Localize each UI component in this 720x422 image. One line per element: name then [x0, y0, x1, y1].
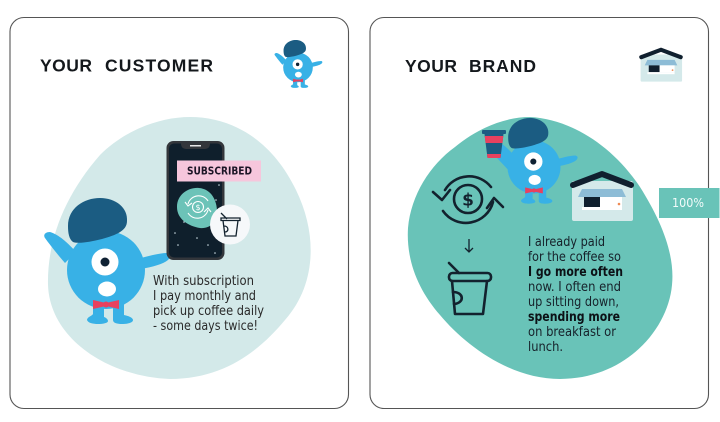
- icon: takeaway cup: [482, 130, 506, 158]
- panel: your customer: [10, 18, 348, 408]
- text: brand quote: I go more often: [528, 265, 623, 280]
- icon: recurring payment: [433, 176, 503, 223]
- icon: recurring payment on phone: $: [195, 203, 201, 212]
- text: brand quote: lunch.: [528, 340, 563, 355]
- heading: your brand: YOUR: [405, 56, 457, 76]
- text: customer quote: I pay monthly and: [153, 289, 256, 304]
- icon: coffee cup: [449, 263, 491, 314]
- panel: your brand: [370, 18, 708, 408]
- tag: 100%: 100%: [672, 196, 704, 210]
- mascot: brand with coffee: [482, 118, 578, 204]
- text: brand quote: [528, 235, 623, 355]
- blob: brand background: [408, 117, 672, 379]
- heading: your brand: BRAND: [469, 56, 536, 76]
- text: brand quote: spending more: [528, 310, 620, 325]
- text: customer quote: pick up coffee daily: [153, 304, 264, 319]
- icon: cup in circle: [210, 204, 250, 244]
- tag: 100%: [659, 188, 720, 218]
- text: brand quote: I already paid: [528, 235, 605, 250]
- heading: your brand: [405, 56, 536, 76]
- heading: your customer: CUSTOMER: [105, 56, 213, 76]
- text: customer quote: With subscription: [153, 274, 254, 289]
- mascot: customer: [44, 198, 170, 324]
- blob: customer background: [48, 117, 311, 379]
- text: brand quote: for the coffee so: [528, 250, 621, 265]
- heading: your customer: YOUR: [40, 56, 92, 76]
- icon: small mascot: [275, 40, 322, 88]
- icon: recurring payment: $: [462, 190, 474, 210]
- icon: small shop: [641, 50, 682, 82]
- text: customer quote: [153, 274, 264, 334]
- text: brand quote: now. I often end: [528, 280, 621, 295]
- icon: down arrow: [465, 239, 473, 252]
- phone: [166, 141, 261, 260]
- heading: your customer: [40, 56, 213, 76]
- icon: shop: [572, 174, 633, 221]
- text: brand quote: on breakfast or: [528, 325, 617, 340]
- text: brand quote: up sitting down,: [528, 295, 619, 310]
- text: customer quote: - some days twice!: [153, 319, 258, 334]
- badge: subscribed: SUBSCRIBED: [187, 166, 252, 178]
